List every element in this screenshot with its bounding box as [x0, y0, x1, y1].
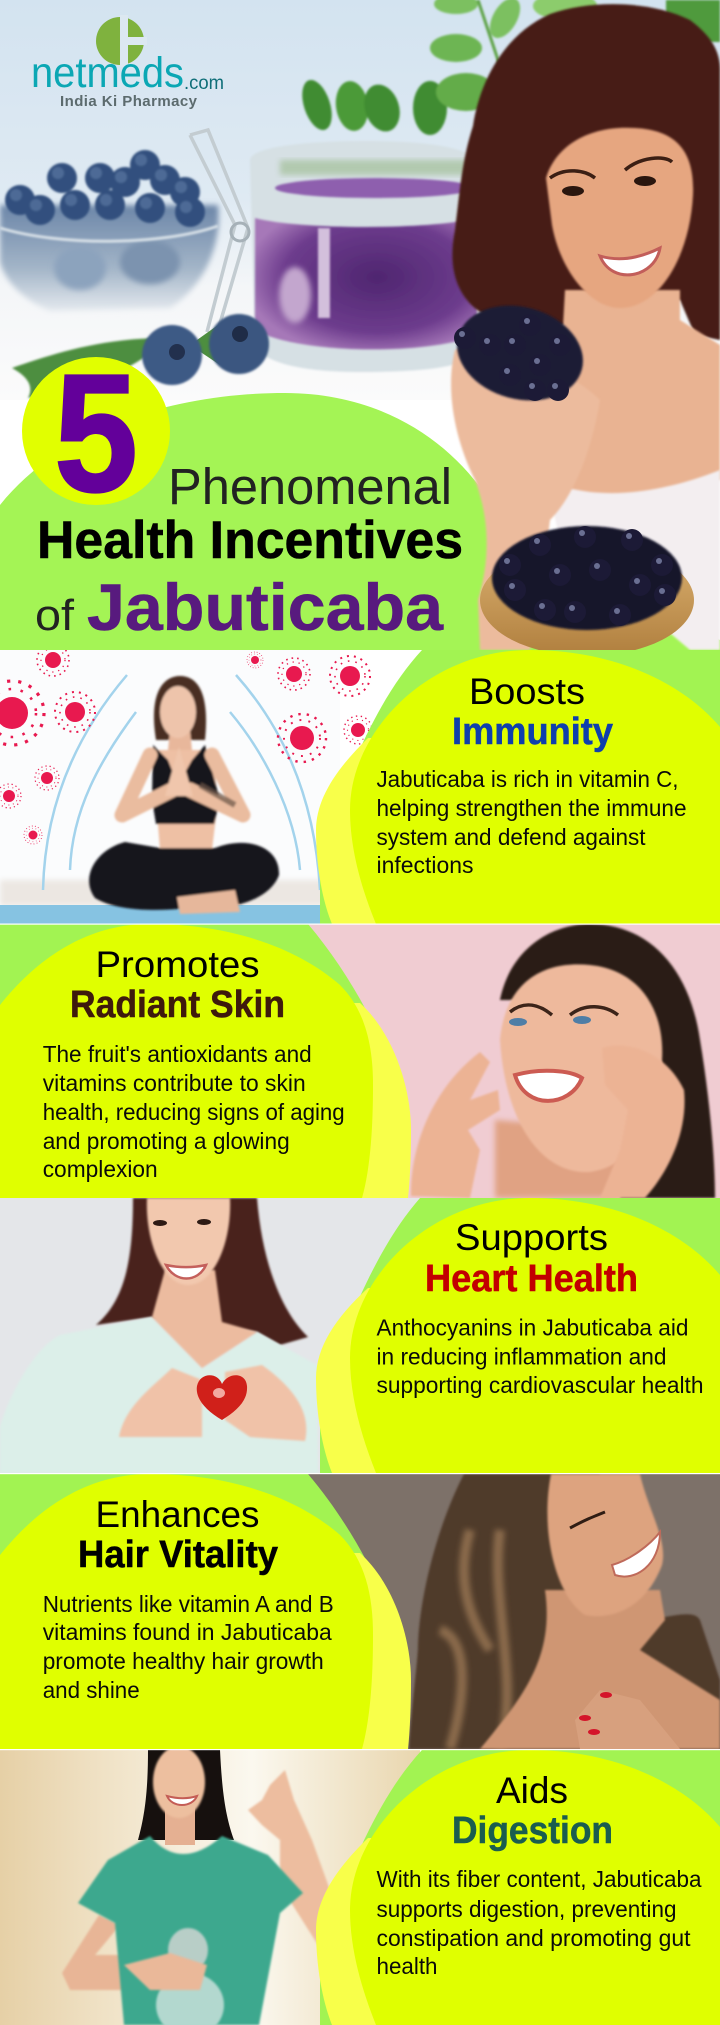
panel 2: skin: Radiant Skin — [70, 984, 285, 1026]
towel — [546, 470, 720, 650]
brows and eyes — [510, 1005, 618, 1015]
smile — [600, 248, 660, 275]
logo icon — [96, 15, 147, 67]
neck and chest — [562, 288, 720, 494]
description: health, reducing signs of aging — [43, 1099, 345, 1125]
neck and chest — [152, 1270, 257, 1368]
green backdrop — [320, 1198, 720, 1473]
description: Anthocyanins in Jabuticaba aid — [376, 1314, 688, 1340]
heading: Boosts — [469, 671, 585, 712]
panel 4: hair — [0, 1474, 720, 1749]
green backdrop — [0, 924, 366, 1198]
smile — [612, 1532, 660, 1577]
green backdrop — [320, 650, 720, 924]
title: Jabuticaba — [87, 570, 444, 644]
green title panel — [0, 393, 720, 650]
hair — [96, 1198, 308, 1345]
description — [376, 1314, 704, 1398]
description: supporting cardiovascular health — [376, 1372, 704, 1398]
lime circle — [0, 924, 373, 1198]
red heart — [197, 1375, 247, 1420]
eyes — [562, 176, 656, 196]
description — [376, 766, 686, 878]
description: vitamins contribute to skin — [43, 1070, 306, 1096]
berries in hand — [454, 304, 585, 402]
description: constipation and promoting gut — [376, 1925, 691, 1951]
blueberry glass bowl — [0, 150, 219, 311]
lime circle — [350, 1198, 720, 1473]
title: Phenomenal — [168, 458, 452, 515]
hand on belly — [124, 1953, 207, 1990]
description: health — [376, 1953, 438, 1979]
description: and promoting a glowing — [43, 1128, 290, 1154]
tagline: India Ki Pharmacy — [60, 93, 198, 110]
description: in reducing inflammation and — [376, 1344, 666, 1370]
number badge — [22, 339, 170, 527]
pale circle — [340, 1003, 411, 1198]
description: Nutrients like vitamin A and B — [43, 1591, 334, 1617]
panel 3: heart: Heart Health — [425, 1258, 638, 1300]
smile — [167, 1796, 197, 1805]
lime circle — [350, 650, 720, 924]
hair photo — [300, 1474, 720, 1749]
panel 1: immunity — [0, 644, 720, 924]
description: With its fiber content, Jabuticaba — [376, 1866, 702, 1892]
smile — [515, 1071, 582, 1101]
panel 5: digestion: Digestion — [452, 1810, 613, 1852]
woman holding jabuticaba — [446, 4, 720, 656]
hands — [119, 1365, 306, 1441]
face — [147, 1198, 230, 1285]
face — [500, 964, 662, 1172]
logo: .com — [184, 73, 224, 94]
smile — [166, 1265, 206, 1278]
face — [547, 1474, 663, 1616]
neck — [165, 1805, 195, 1845]
yoga photo — [0, 644, 372, 924]
left arm — [62, 1915, 130, 1990]
description: promote healthy hair growth — [43, 1648, 324, 1674]
description: vitamins found in Jabuticaba — [43, 1619, 332, 1645]
face — [546, 128, 693, 308]
description — [376, 1866, 702, 1979]
gown — [0, 1317, 318, 1473]
logo — [31, 15, 224, 110]
panel 2: skin — [0, 924, 720, 1198]
description: supports digestion, preventing — [376, 1896, 676, 1922]
description: and shine — [43, 1677, 140, 1703]
green backdrop — [320, 1750, 720, 2025]
title — [35, 458, 463, 644]
hero photo background — [0, 0, 720, 400]
neck — [495, 1120, 620, 1198]
heading: Promotes — [96, 944, 260, 985]
arm and hand — [451, 347, 600, 650]
table blueberries and leaves — [12, 314, 269, 398]
description: helping strengthen the immune — [376, 795, 686, 821]
description: Jabuticaba is rich in vitamin C, — [376, 766, 678, 792]
lime circle — [350, 1750, 720, 2025]
number badge: 5 — [54, 339, 138, 527]
panel 5: digestion — [0, 1746, 720, 2025]
lime circle — [0, 1474, 373, 1749]
stomach illustration — [156, 1928, 224, 2025]
panel 1: immunity: Immunity — [452, 711, 613, 753]
hand with red nails — [575, 1690, 680, 1749]
yoga woman — [89, 676, 279, 914]
foliage — [297, 0, 720, 136]
hair — [452, 4, 720, 340]
green backdrop — [0, 1474, 366, 1749]
skin photo — [300, 924, 720, 1198]
face — [153, 1746, 205, 1818]
neck and shoulder — [480, 1590, 720, 1749]
pale circle — [316, 1288, 400, 1473]
teal tee — [78, 1836, 303, 2025]
pale circle — [316, 1838, 400, 2025]
description — [43, 1041, 345, 1182]
wordmark: netmeds — [31, 49, 184, 97]
digestion photo — [0, 1746, 420, 2025]
dark hair — [500, 924, 715, 1198]
panel 3: heart — [0, 1198, 720, 1473]
panel 4: hair: Hair Vitality — [78, 1534, 278, 1576]
wooden bowl of berries — [480, 526, 694, 656]
right arm and ok hand — [248, 1770, 330, 1945]
description: system and defend against — [376, 824, 646, 850]
heading: Supports — [455, 1217, 608, 1258]
pale circle — [316, 738, 400, 924]
heart photo — [0, 1198, 420, 1473]
description: The fruit's antioxidants and — [43, 1041, 312, 1067]
description: infections — [376, 852, 474, 878]
purple jar — [190, 130, 477, 372]
hair mass — [409, 1474, 720, 1749]
pale circle — [340, 1553, 411, 1749]
title: Health Incentives — [37, 511, 463, 570]
heading: Enhances — [96, 1494, 260, 1535]
description — [43, 1591, 334, 1703]
hands — [411, 1052, 500, 1198]
hair — [138, 1750, 234, 1840]
description: complexion — [43, 1156, 158, 1182]
heading: Aids — [496, 1770, 568, 1811]
title: of — [35, 591, 75, 640]
